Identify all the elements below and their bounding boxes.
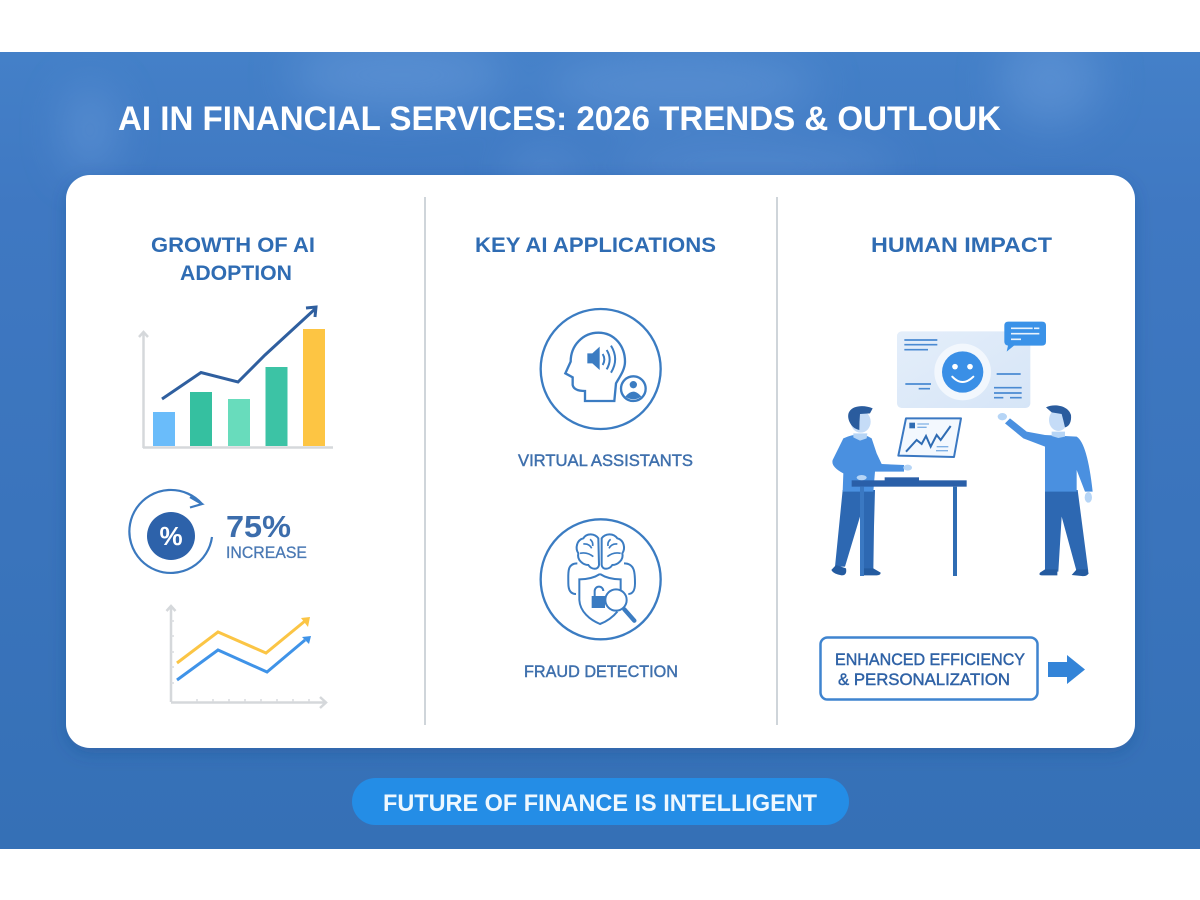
icon: percent in circular arrow xyxy=(129,490,212,573)
callout: enhanced efficiency: ENHANCED EFFICIENCY xyxy=(835,650,1025,669)
stat: 75% increase xyxy=(226,509,307,562)
heading: growth of AI adoption: ADOPTION xyxy=(180,262,292,285)
icon: percent in circular arrow: % xyxy=(159,521,183,551)
banner: future of finance xyxy=(352,778,849,825)
speech bubble xyxy=(1004,322,1046,352)
heading: key AI applications: KEY AI APPLICATIONS xyxy=(475,234,716,257)
tablet with chart xyxy=(898,418,961,457)
label: virtual assistants: VIRTUAL ASSISTANTS xyxy=(518,452,693,470)
callout: enhanced efficiency: & PERSONALIZATION xyxy=(838,670,1010,689)
label: fraud detection: FRAUD DETECTION xyxy=(524,663,678,681)
title: AI IN FINANCIAL SERVICES: 2026 TRENDS & OUTLOUK xyxy=(118,100,1001,138)
panel: key AI applications xyxy=(475,234,716,681)
line chart with two trends xyxy=(166,606,326,708)
desk xyxy=(852,477,967,576)
illustration: people with smiley display xyxy=(831,322,1093,576)
stat: 75% increase: 75% xyxy=(226,509,291,544)
main white card xyxy=(66,175,1135,748)
icon: virtual assistant head xyxy=(541,309,661,429)
icon: fraud detection brain and shield xyxy=(541,519,661,639)
heading: growth of AI adoption: GROWTH OF AI xyxy=(151,234,315,257)
panel: human impact xyxy=(820,234,1093,700)
stat: 75% increase: INCREASE xyxy=(226,544,307,562)
bar chart with trend arrow xyxy=(139,307,333,448)
heading: growth of AI adoption xyxy=(151,234,315,285)
banner: future of finance: FUTURE OF FINANCE IS INTELLIGENT xyxy=(383,790,817,817)
panel: growth of AI adoption xyxy=(129,234,333,708)
display panel with smiley xyxy=(897,331,1030,408)
arrow xyxy=(1048,655,1085,684)
heading: human impact: HUMAN IMPACT xyxy=(871,234,1052,257)
callout: enhanced efficiency xyxy=(820,638,1038,700)
left person xyxy=(831,406,912,575)
right person xyxy=(998,405,1093,576)
